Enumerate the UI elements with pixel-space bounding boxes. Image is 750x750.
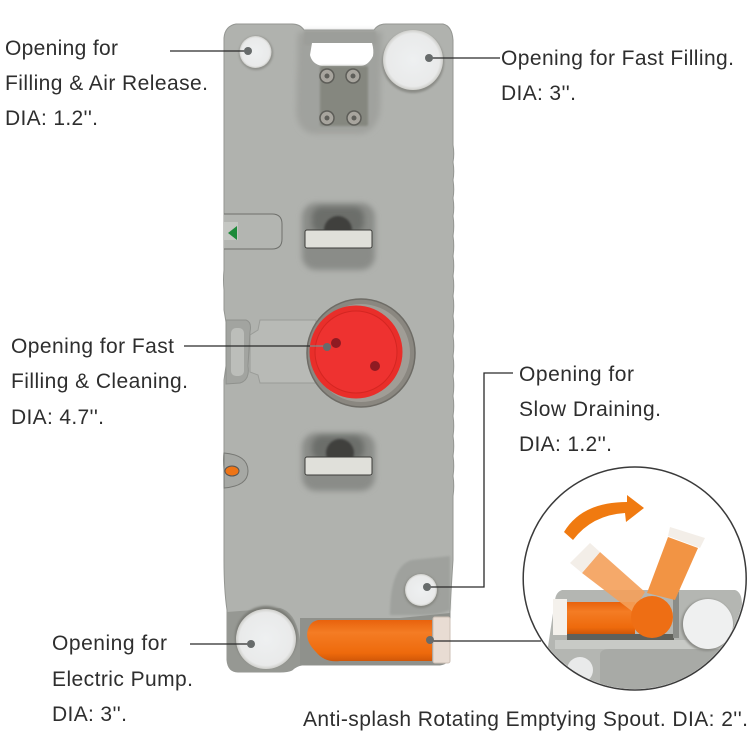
label: slow draining: Slow Draining. bbox=[519, 398, 661, 421]
orange rotation arrow bbox=[564, 495, 644, 540]
inset tank section bbox=[548, 590, 742, 689]
label: emptying spout: Anti-splash Rotating Emptying Spout. DIA: 2''. bbox=[303, 708, 748, 731]
lower grip recess bbox=[302, 433, 375, 491]
label: filling and air release: Filling & Air Release. bbox=[5, 72, 208, 95]
inset: rotating spout bbox=[523, 467, 750, 700]
label: fast filling: Opening for Fast Filling. bbox=[501, 47, 734, 70]
inset left raised spout bbox=[570, 543, 645, 612]
label: filling and air release: DIA: 1.2''. bbox=[5, 107, 98, 130]
inset spout end bbox=[553, 599, 567, 635]
inset elbow bbox=[631, 596, 673, 638]
red cap assembly bbox=[307, 299, 415, 407]
label: fast filling and cleaning bbox=[11, 335, 188, 429]
orange spout bbox=[307, 617, 450, 663]
inset white cap bbox=[681, 599, 733, 651]
label: filling and air release: Opening for bbox=[5, 37, 118, 60]
inset small cap bbox=[568, 657, 593, 679]
label: fast filling bbox=[501, 47, 734, 105]
side recess and notch bbox=[226, 320, 316, 384]
label: fast filling and cleaning: Opening for Fast bbox=[11, 335, 174, 358]
label: slow draining: DIA: 1.2''. bbox=[519, 433, 612, 456]
label: fast filling and cleaning: DIA: 4.7''. bbox=[11, 406, 104, 429]
inset horizontal spout bbox=[567, 602, 635, 634]
label: electric pump bbox=[52, 632, 193, 726]
leader lines and dots bbox=[170, 51, 541, 644]
label: electric pump: Opening for bbox=[52, 632, 167, 655]
screws bbox=[320, 69, 361, 125]
handle opening bbox=[310, 43, 373, 66]
main body lower edge and rear plate bbox=[300, 613, 450, 665]
inset right raised spout bbox=[647, 527, 705, 600]
label: electric pump: DIA: 3''. bbox=[52, 703, 127, 726]
label: filling and air release bbox=[5, 37, 208, 130]
tank silhouette bbox=[224, 24, 454, 672]
leader dots bbox=[244, 47, 434, 648]
label: fast filling and cleaning: Filling & Cleaning. bbox=[11, 370, 188, 393]
label panel with green marker bbox=[224, 214, 282, 249]
label: slow draining: Opening for bbox=[519, 363, 634, 386]
cap: large top-right bbox=[382, 30, 444, 93]
orange indicator bbox=[224, 453, 248, 488]
label: fast filling: DIA: 3''. bbox=[501, 82, 576, 105]
cap: large bottom-left bbox=[227, 606, 300, 672]
spout end bbox=[433, 617, 450, 663]
label: slow draining bbox=[519, 363, 661, 456]
tank body bbox=[224, 24, 454, 672]
inset circle background bbox=[523, 467, 746, 690]
metal plate bbox=[320, 66, 368, 126]
cap: small top-left bbox=[239, 36, 273, 70]
handle recess bbox=[296, 31, 382, 134]
label: electric pump: Electric Pump. bbox=[52, 668, 193, 691]
upper grip recess bbox=[302, 203, 375, 270]
small cap recess and cap: bottom-right bbox=[390, 556, 450, 615]
